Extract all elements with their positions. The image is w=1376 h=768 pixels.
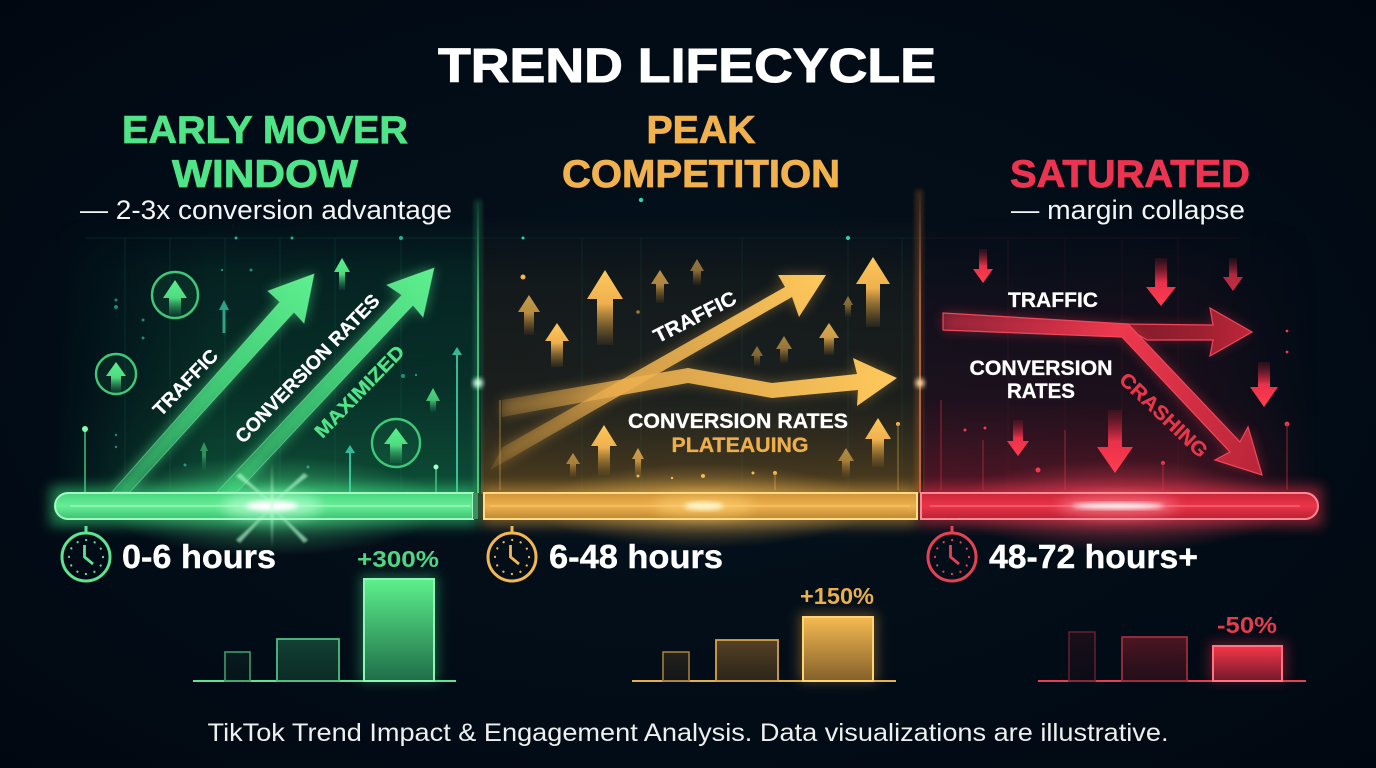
label: 48-72 hours+: 48-72 hours+ (989, 538, 1198, 575)
heading: saturated: SATURATED (1010, 153, 1250, 196)
flare: green (222, 462, 322, 548)
label: crashing: CRASHING (1115, 369, 1212, 463)
label: 0-6 hours: 0-6 hours (122, 538, 276, 575)
bar chart: early mover (193, 546, 456, 681)
subheading: conversion advantage: — 2-3x conversion advantage (80, 195, 452, 225)
icon: circled up arrow top (152, 272, 198, 318)
footer note: TikTok Trend Impact & Engagement Analysis. Data visualizations are illustrative. (208, 719, 1168, 747)
label: traffic: TRAFFIC (650, 287, 740, 348)
icon: amber clock (488, 526, 536, 581)
glow: flares around bar (102, 456, 1288, 556)
arrow: traffic flattening (1120, 308, 1252, 356)
heading: peak competition: COMPETITION (562, 153, 840, 196)
value: +300%: +300% (357, 546, 439, 572)
bar chart: saturated (1038, 612, 1306, 681)
arrow: conversion crashing (943, 313, 1262, 475)
icon: red down arrows (973, 249, 1278, 473)
panel: early mover background (74, 236, 477, 493)
icon: amber up arrows (518, 257, 891, 477)
bar chart: peak competition (632, 583, 896, 681)
heading: early mover window: EARLY MOVER (122, 109, 408, 152)
value: -50%: -50% (1217, 612, 1277, 638)
segment: green (55, 493, 478, 519)
segment: red (921, 493, 1318, 519)
icon: red clock (928, 526, 976, 581)
segment: amber (484, 493, 917, 519)
arrow: conversion rising (217, 268, 434, 492)
arrow: traffic rising slowly (490, 275, 826, 470)
label: conversion rates: RATES (1007, 380, 1075, 403)
flare: amber (654, 496, 754, 516)
panel: peak competition background (481, 198, 919, 494)
timeline bar (50, 456, 1322, 556)
heading: peak competition: PEAK (646, 109, 756, 152)
label: conversion rates (970, 357, 1112, 403)
label: traffic: TRAFFIC (1008, 289, 1098, 312)
chart: peak competition arrows (490, 257, 897, 477)
icon: small green up arrows (82, 258, 462, 492)
heading: early mover window: WINDOW (172, 153, 358, 196)
heading: early mover window (122, 109, 408, 196)
label: plateauing: PLATEAUING (672, 434, 808, 457)
icon: green clock (62, 526, 110, 581)
dividers between phases (473, 190, 924, 493)
label: maximized: MAXIMIZED (311, 342, 409, 443)
value: +150%: +150% (800, 583, 874, 609)
chart: saturated arrows (943, 249, 1278, 475)
icon: circled up arrow right (372, 419, 420, 467)
flare: red (1058, 496, 1178, 516)
title: TREND LIFECYCLE (438, 40, 936, 93)
label: conversion rates: CONVERSION RATES (232, 291, 384, 448)
arrow: conversion plateau (502, 358, 897, 417)
subheading: margin collapse: — margin collapse (1011, 195, 1245, 225)
label: conversion rates: CONVERSION (970, 357, 1112, 380)
panel: saturated background (923, 238, 1302, 492)
label: 6-48 hours: 6-48 hours (549, 538, 723, 575)
heading: peak competition (562, 109, 840, 196)
icon: circled up arrow left (96, 354, 136, 394)
arrow: traffic rising (112, 274, 314, 492)
label: traffic: TRAFFIC (149, 345, 223, 421)
chart: early mover arrows (82, 258, 462, 492)
label: conversion rates: CONVERSION RATES (628, 410, 848, 433)
